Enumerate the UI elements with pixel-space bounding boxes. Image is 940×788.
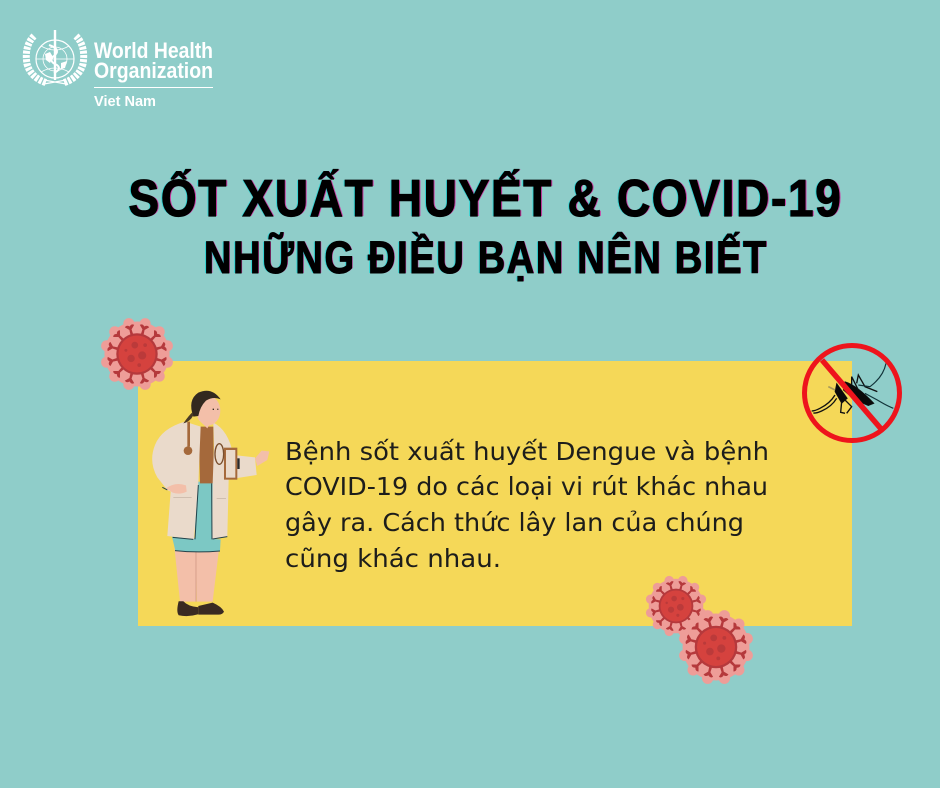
text block: message xyxy=(285,437,769,573)
title line 2: NHỮNG ĐIỀU BẠN NÊN BIẾT xyxy=(205,232,769,283)
illustration: doctor xyxy=(152,391,269,616)
logo: World Health Organization Viet Nam: Viet Nam xyxy=(94,93,156,110)
icon: mosquito xyxy=(812,363,893,413)
red prohibition ring xyxy=(804,346,900,440)
icon: virus top left xyxy=(101,318,173,390)
logo: World Health Organization Viet Nam xyxy=(26,30,213,110)
title line 1: SỐT XUẤT HUYẾT & COVID-19 xyxy=(127,169,841,228)
logo text: World Health xyxy=(94,38,213,63)
icon: virus small bottom xyxy=(646,576,706,636)
text block: message: cũng khác nhau. xyxy=(285,544,501,573)
text block: message: gây ra. Cách thức lây lan của chúng xyxy=(285,508,744,537)
logo: World Health Organization Viet Nam: Organization xyxy=(94,58,213,83)
title line 1: SỐT XUẤT HUYẾT & COVID-19 xyxy=(128,169,842,228)
panel: yellow message box xyxy=(138,361,852,626)
icon: WHO emblem xyxy=(26,30,84,84)
title line 2: NHỮNG ĐIỀU BẠN NÊN BIẾT xyxy=(204,232,768,283)
title line 2: NHỮNG ĐIỀU BẠN NÊN BIẾT xyxy=(202,232,766,283)
text block: message: COVID-19 do các loại vi rút khác nhau xyxy=(285,472,768,501)
icon: no mosquito sign xyxy=(804,346,900,440)
title line 1: SỐT XUẤT HUYẾT & COVID-19 xyxy=(130,169,844,228)
title xyxy=(127,169,844,283)
text block: message: Bệnh sốt xuất huyết Dengue và bệnh xyxy=(285,437,769,466)
icon: virus large bottom xyxy=(679,610,753,684)
